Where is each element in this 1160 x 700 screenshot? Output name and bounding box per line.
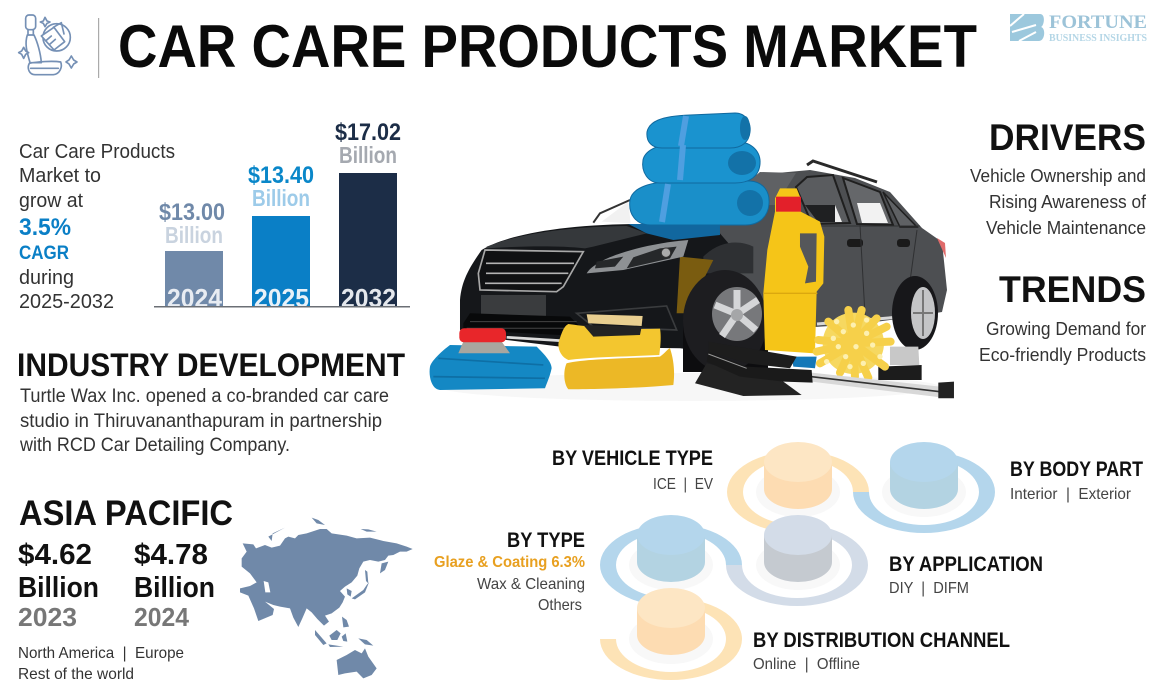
bar 2024: $13.00	[159, 199, 225, 226]
other regions: Rest of the world	[18, 666, 134, 683]
divider	[98, 18, 99, 78]
ground shadow	[440, 373, 940, 401]
label: by distribution channel: BY DISTRIBUTION CHANNEL	[753, 629, 1010, 652]
cylinder: distribution channel	[637, 588, 705, 655]
map: Asia Pacific	[240, 518, 413, 678]
rear wheel	[892, 276, 938, 350]
other regions: North America | Europe	[18, 645, 184, 662]
logo: Fortune Business Insights: BUSINESS INSIGHTS	[1049, 32, 1147, 44]
text block: drivers: Vehicle Maintenance	[986, 218, 1146, 238]
text block: trends: Growing Demand for	[986, 319, 1146, 339]
bar 2025: 2025	[254, 283, 309, 313]
ring: application	[726, 524, 868, 606]
bar chart	[154, 119, 410, 313]
label: by type: Wax & Cleaning	[477, 576, 585, 593]
text block: CAGR statement	[19, 141, 175, 313]
label: by type: Others	[538, 597, 582, 614]
bar 2032: 2032	[341, 283, 396, 313]
label: by application: DIY | DIFM	[889, 580, 969, 597]
other regions	[18, 645, 184, 683]
label: by type	[434, 529, 585, 614]
label: by application: BY APPLICATION	[889, 553, 1043, 576]
text block: CAGR statement: 2025-2032	[19, 291, 114, 313]
segmentation diagram	[600, 442, 995, 680]
black brush	[695, 342, 813, 396]
blue towel and red brush	[430, 328, 552, 390]
label: by body part: Interior | Exterior	[1010, 486, 1132, 503]
photo: car with care products	[430, 113, 954, 401]
label: by type: BY TYPE	[507, 529, 585, 552]
text block: trends	[979, 319, 1146, 365]
label: by vehicle type: ICE | EV	[653, 476, 713, 493]
text block: CAGR statement: 3.5%	[19, 214, 71, 241]
bar 2024: 2024	[167, 283, 223, 313]
towels stack	[630, 113, 769, 225]
cylinder: body part	[890, 442, 958, 509]
stat: 2024: Billion	[134, 572, 215, 604]
ring: vehicle type	[727, 451, 869, 533]
stat: 2024: $4.78	[134, 539, 208, 571]
bar 2024	[159, 199, 225, 313]
cylinder: application	[764, 515, 832, 582]
heading: drivers: DRIVERS	[989, 117, 1146, 158]
title: CAR CARE PRODUCTS MARKET	[118, 13, 977, 80]
label: by body part	[1010, 458, 1143, 503]
bar 2032: Billion	[339, 142, 397, 168]
text block: CAGR statement: Market to	[19, 165, 101, 187]
logo: Fortune Business Insights	[1010, 12, 1147, 44]
bar 2032	[335, 119, 401, 313]
text block: trends: Eco-friendly Products	[979, 345, 1146, 365]
text block: industry development: studio in Thiruvananthapuram in partnership	[20, 411, 382, 432]
cylinder: by type	[637, 515, 705, 582]
ring: by type	[600, 524, 742, 606]
text block: industry development: Turtle Wax Inc. opened a co-branded car care	[20, 386, 389, 407]
text block: CAGR statement: CAGR	[19, 243, 69, 264]
logo: Fortune Business Insights: FORTUNE	[1049, 12, 1147, 33]
stat: 2024	[134, 539, 215, 632]
shadows	[629, 467, 966, 664]
stat: 2023: Billion	[18, 572, 99, 604]
ring: body part	[853, 451, 995, 533]
bar 2025: $13.40	[248, 162, 314, 189]
text block: drivers	[970, 166, 1147, 238]
stat: 2023	[18, 539, 99, 632]
text block: CAGR statement: Car Care Products	[19, 141, 175, 163]
front wheel	[683, 270, 768, 372]
stat: 2023: 2023	[18, 602, 77, 632]
text block: industry development	[19, 386, 389, 456]
bar 2025	[248, 162, 314, 313]
text block: drivers: Vehicle Ownership and	[970, 166, 1146, 186]
yellow spiked brush	[817, 310, 891, 378]
stat: 2024: 2024	[134, 602, 190, 632]
bar 2032: $17.02	[335, 119, 401, 146]
label: by distribution channel	[753, 629, 1010, 673]
chrome jar	[878, 347, 922, 380]
ring: distribution channel	[600, 598, 742, 680]
stat: 2023: $4.62	[18, 539, 92, 571]
yellow towels and brush	[558, 314, 674, 389]
text block: industry development: with RCD Car Detailing Company.	[19, 435, 290, 456]
heading: Asia Pacific: ASIA PACIFIC	[19, 494, 233, 533]
label: by type: Glaze & Coating 6.3%	[434, 554, 585, 571]
car front	[460, 200, 753, 353]
label: by application	[889, 553, 1043, 597]
label: by vehicle type	[552, 447, 713, 493]
text block: CAGR statement: grow at	[19, 190, 83, 212]
bar 2025: Billion	[252, 185, 310, 211]
heading: industry development: INDUSTRY DEVELOPMENT	[17, 347, 405, 383]
label: by vehicle type: BY VEHICLE TYPE	[552, 447, 713, 470]
label: by distribution channel: Online | Offline	[753, 656, 860, 673]
icon: car seat cleaning	[19, 15, 77, 75]
text block: drivers: Rising Awareness of	[989, 192, 1147, 212]
metal handle	[812, 373, 954, 398]
black brush, bottle, yellow brush	[695, 188, 954, 398]
bar 2024: Billion	[165, 222, 223, 248]
text block: CAGR statement: during	[19, 267, 74, 289]
heading: trends: TRENDS	[999, 269, 1146, 310]
car rear body	[690, 161, 947, 338]
bottle	[763, 188, 824, 368]
cylinder: vehicle type	[764, 442, 832, 509]
